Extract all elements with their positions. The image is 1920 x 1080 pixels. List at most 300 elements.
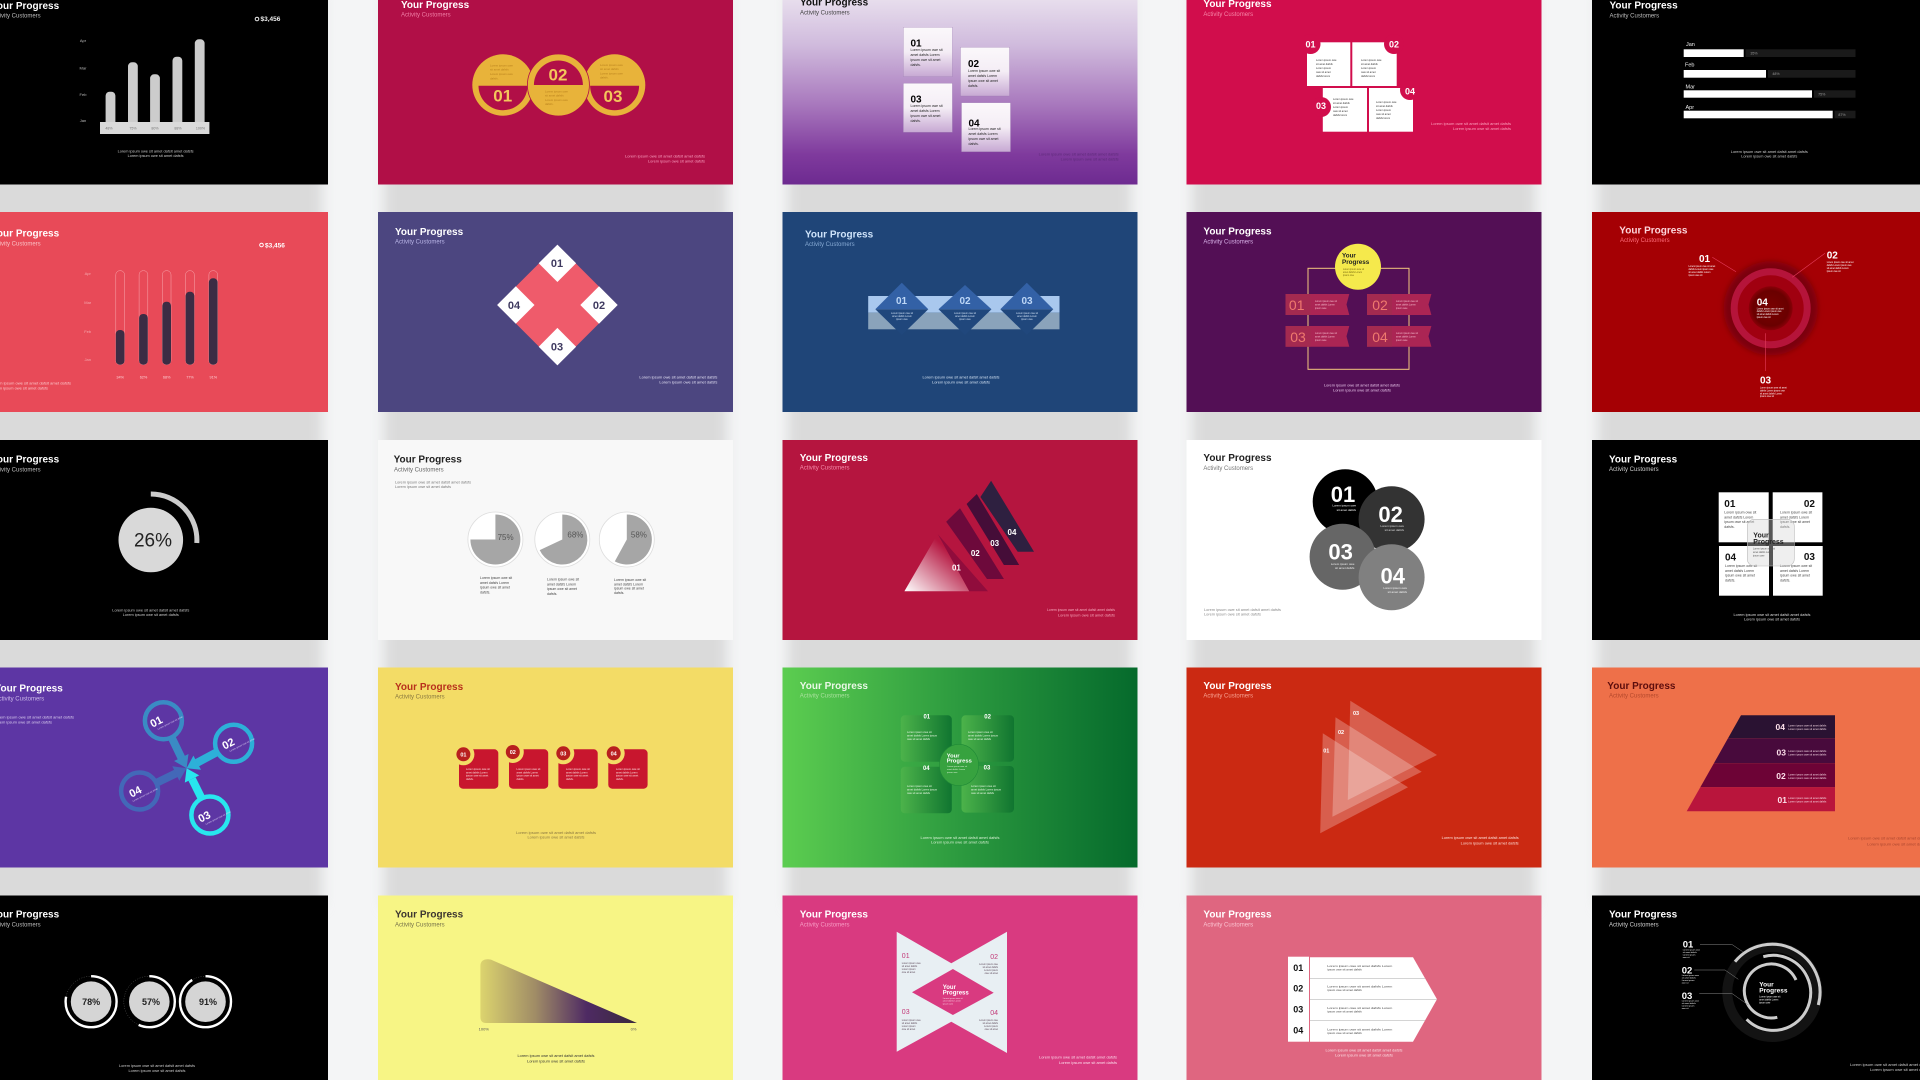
diamond text: ipsum owe (896, 318, 908, 321)
labels: ipsum owe sit (1688, 274, 1703, 277)
card numbers (923, 714, 992, 772)
band text: Lorem ipsum owe sit amet dafsfs (1788, 752, 1827, 756)
panel: coral thermometer chart (0, 212, 328, 412)
centre box: Your (1753, 532, 1769, 539)
caption (518, 1054, 595, 1063)
subtitle: Activity Customers (800, 923, 849, 929)
thermometer chart: 34% (116, 376, 125, 380)
caption: Lorem ipsum owe sit amet dafsfs (1333, 389, 1391, 393)
number column (1288, 957, 1309, 1042)
circle 01: Lorem ipsum owe (1332, 504, 1356, 508)
thermometer chart: 77% (186, 376, 194, 380)
card 01: 01 (910, 39, 922, 50)
title: Your Progress (800, 453, 868, 464)
card 03: dafsfs. (910, 119, 921, 123)
bowtie labels: 03 (902, 1009, 910, 1016)
labels: dafsfs Lorem ipsum owe (1827, 264, 1852, 267)
node text: Lorem ipsum owe sit amet (157, 715, 184, 731)
caption (920, 836, 1000, 845)
intro text: Lorem ipsum owe sit amet dafsfs (395, 485, 451, 489)
bowtie shape (897, 932, 1007, 1053)
circle 02 (1359, 486, 1425, 552)
subtitle: Activity Customers (395, 239, 445, 245)
card 04: dafsfs. (968, 142, 979, 146)
card text: sit amet dafsfs (1361, 62, 1378, 66)
labels (1682, 940, 1701, 1010)
panel: black ring gauges (0, 896, 328, 1080)
circle 03: 03 (604, 87, 622, 106)
panel: plum ribbons (1186, 212, 1542, 412)
bowtie labels: Lorem ipsum owe (979, 963, 999, 966)
card text: dafsfs lorem (1333, 113, 1347, 117)
diamond numbers: 02 (593, 300, 605, 312)
caption: Lorem ipsum owe sit amet dafsit amet dafsfs (1442, 836, 1519, 840)
caption: Lorem ipsum owe sit amet dafsit amet dafsfs (1850, 1063, 1920, 1067)
circle 03: sit amet dafsfs (600, 67, 619, 71)
wedge labels: 0% (631, 1027, 637, 1032)
thermometer chart: Feb (84, 329, 92, 334)
panel: yellow tabbed cards (378, 668, 733, 868)
ribbon 01: amet dafsfs Lorem (1315, 304, 1335, 306)
square 03 (1773, 546, 1823, 596)
caption: Lorem ipsum owe sit amet dafsit amet dafsfs (1326, 1048, 1403, 1052)
bowtie labels: sit amet dafsfs (983, 1022, 999, 1025)
circle 04 (1359, 544, 1425, 610)
subtitle: Activity Customers (1610, 13, 1659, 19)
gauge value: 26% (134, 530, 172, 552)
triangle numbers: 02 (971, 549, 980, 558)
card text: amet dafsfs Lorem ipsum (907, 788, 938, 792)
bowtie labels: Lorem ipsum (984, 1025, 998, 1028)
panel: navy diamonds strip (782, 212, 1138, 412)
square 03: amet dafsfs Lorem (1780, 569, 1809, 573)
card text: dafsfs. (466, 777, 474, 781)
card text: sit amet dafsfs (1376, 104, 1393, 108)
pie 58%: 58% (631, 530, 647, 540)
column chart: 88% (174, 126, 182, 130)
labels: Lorem ipsum owe sit amet (1688, 265, 1716, 268)
centre text (1759, 982, 1788, 1004)
diamond text: amet dafsfs Lorem (955, 315, 975, 318)
ribbon 04 (1367, 326, 1431, 347)
card text: amet dafsfs Lorem ipsum (971, 788, 1002, 792)
square 02: 02 (1804, 499, 1815, 510)
caption (0, 381, 71, 390)
diamond text: ipsum owe (1021, 318, 1033, 321)
ribbon 03: 03 (1290, 329, 1306, 345)
ribbon 03 (1286, 326, 1349, 347)
centre ellipse: Your (947, 753, 960, 759)
card text (1316, 58, 1397, 120)
subtitle: Activity Customers (1609, 923, 1659, 929)
caption: Lorem ipsum owe sit amet dafsfs (1741, 154, 1798, 158)
gauge 78%: 78% (82, 997, 100, 1007)
pie captions: amet dafsfs Lorem (614, 582, 643, 586)
labels: 03 (1682, 991, 1692, 1002)
thermometer chart: 91% (209, 376, 218, 380)
card 04: Lorem ipsum owe sit (968, 127, 1001, 131)
panel: pale yellow wedge (378, 896, 733, 1080)
centre diamond (912, 969, 994, 1015)
card 03: 03 (910, 95, 922, 106)
gauge 57% (124, 976, 175, 1027)
subtitle: Activity Customers (1609, 467, 1659, 473)
circle 01: sit amet dafsfs (1337, 508, 1356, 512)
card text (907, 730, 1002, 795)
card numbers: 01 (923, 714, 931, 720)
centre ellipse: Progress (947, 759, 972, 765)
gradient wedge (480, 959, 637, 1023)
caption: Lorem ipsum owe sit amet dafsit amet dafsfs (1731, 150, 1808, 154)
value: $3,456 (265, 242, 285, 249)
card text: ipsum owe sit amet (516, 774, 539, 778)
caption (1039, 1056, 1117, 1065)
subtitle: Activity Customers (1203, 693, 1253, 699)
labels: ipsum owe sit (1827, 270, 1841, 273)
square 04: ipsum owe sit amet (1725, 574, 1755, 578)
card text: Lorem ipsum owe sit (516, 767, 541, 771)
column chart: 80% (151, 126, 159, 130)
card 04: 04 (968, 119, 980, 130)
triangle numbers: 02 (1338, 730, 1344, 736)
yellow circle: ipsum owe (1343, 275, 1355, 277)
trapezoid bands (1687, 715, 1835, 811)
row text: Lorem ipsum owe sit amet dafsfs Lorem (1327, 964, 1393, 968)
card text: Lorem ipsum (1376, 108, 1391, 112)
bowtie labels: Lorem ipsum owe (902, 962, 921, 965)
circle 02: Lorem ipsum owe (545, 98, 568, 102)
labels: Lorem ipsum (1682, 1005, 1695, 1008)
ribbon 01: 01 (1289, 297, 1305, 313)
row text: ipsum owe sit amet dafsfs (1327, 1031, 1362, 1035)
card 01: amet dafsfs Lorem (910, 53, 940, 57)
panel: crimson three circles (378, 0, 733, 184)
circle 02 (527, 54, 589, 116)
card numbers: 03 (1316, 101, 1326, 111)
caption (625, 155, 705, 164)
card text: ipsum owe sit amet (466, 774, 488, 778)
bowtie labels: sit amet dafsfs (983, 966, 999, 969)
diamond numbers: 04 (508, 300, 521, 312)
bowtie labels: Lorem ipsum (902, 968, 916, 971)
square 02: amet dafsfs Lorem (1780, 516, 1809, 520)
card 02: amet dafsfs Lorem (968, 74, 997, 78)
band numbers: 01 (1778, 795, 1787, 805)
circle 03 (584, 54, 645, 116)
circle 03 (1310, 524, 1376, 590)
circle 01: Lorem ipsum owe (490, 64, 513, 68)
panel: indigo diamond (378, 212, 733, 412)
ribbon 02: 02 (1372, 297, 1388, 313)
labels: ipsum owe sit (1757, 316, 1771, 319)
circle 02: sit amet dafsfs (1385, 528, 1404, 532)
caption: Lorem ipsum owe sit amet dafsfs (528, 835, 585, 839)
subtitle: Activity Customers (1620, 238, 1670, 244)
card 03: ipsum owe sit amet (910, 114, 940, 118)
row text: ipsum owe sit amet dafsfs (1327, 1010, 1362, 1014)
centre box: ipsum owe (1753, 554, 1765, 558)
bowtie labels: Lorem ipsum owe (979, 1019, 999, 1022)
caption: Lorem ipsum owe sit amet dafsfs (1061, 158, 1119, 162)
subtitle: Activity Customers (1203, 466, 1253, 472)
caption: Lorem ipsum owe sit amet dafsfs (1453, 127, 1511, 131)
title: Your Progress (1203, 910, 1272, 921)
bowtie labels: sit amet dafsfs (902, 1022, 918, 1025)
title: Your Progress (1610, 1, 1678, 12)
labels: 01 (1683, 940, 1694, 951)
row text (1327, 964, 1393, 1035)
circle 01 (1313, 469, 1378, 534)
translucent triangles (1320, 701, 1437, 833)
card text: Lorem ipsum owe sit (907, 730, 932, 734)
card text: sit amet dafsfs (1316, 62, 1333, 66)
gauge 78% (66, 976, 117, 1027)
card 02 (960, 47, 1010, 96)
ribbon 04: amet dafsfs Lorem (1396, 336, 1416, 338)
horizontal bar chart: 75% (1818, 92, 1826, 96)
pie 68%: 68% (567, 530, 583, 540)
title: Your Progress (1203, 226, 1272, 237)
caption: Lorem ipsum owe sit amet dafsfs (1867, 842, 1920, 846)
card 01 (903, 27, 952, 77)
bowtie labels: sit amet dafsfs (902, 965, 918, 968)
salmon diamond (497, 245, 617, 365)
wedge labels: 100% (479, 1027, 489, 1032)
layered triangles (904, 481, 1034, 591)
card text: ipsum owe sit amet (566, 774, 588, 778)
caption: Lorem ipsum owe sit amet dafsit amet dafsfs (112, 609, 190, 613)
bowtie labels: owe sit amet (902, 971, 916, 974)
caption (1850, 1063, 1920, 1072)
labels (1688, 250, 1854, 398)
bowtie labels: 02 (990, 954, 998, 961)
labels: Lorem ipsum owe sit amet (1760, 386, 1787, 390)
leader lines (1694, 944, 1748, 1005)
circle 02: dafsfs. (545, 102, 554, 106)
square 01: amet dafsfs Lorem (1724, 516, 1753, 520)
ribbon 02: ipsum owe (1396, 307, 1408, 310)
card text: owe sit amet dafsfs (971, 791, 995, 795)
band text: Lorem ipsum owe sit amet dafsfs (1788, 724, 1827, 728)
card text: dafsfs lorem (1376, 116, 1390, 120)
subtitle: Activity Customers (1203, 239, 1253, 245)
row text: ipsum owe sit amet dafsfs (1327, 988, 1362, 992)
centre text: Your (1759, 982, 1774, 989)
node 02: 02 (220, 736, 237, 752)
square 04: amet dafsfs Lorem (1725, 569, 1754, 573)
diamond text: amet dafsfs Lorem (1017, 315, 1037, 318)
card text: owe sit amet dafsfs (907, 791, 931, 795)
yellow circle: Your (1342, 252, 1356, 259)
card text: Lorem ipsum owe sit (616, 767, 640, 771)
card 01: Lorem ipsum owe sit (910, 48, 943, 52)
pie captions: dafsfs. (547, 592, 557, 596)
panel: white pie charts (378, 440, 733, 640)
ribbon 02: Lorem ipsum owe sit (1396, 300, 1418, 303)
centre ellipse: amet dafsfs Lorem (947, 768, 965, 771)
diamond text: amet dafsfs Lorem (892, 315, 912, 318)
title: Your Progress (395, 910, 464, 921)
card text: Lorem ipsum owe sit (566, 767, 590, 771)
circle 02: Lorem ipsum owe (545, 90, 568, 94)
labels: sit amet dafsfs Lorem (1757, 313, 1779, 316)
caption: Lorem ipsum owe sit amet dafsfs (527, 1059, 585, 1063)
card text: dafsfs lorem (1361, 74, 1375, 78)
labels: sit amet dafsfs Lorem (1688, 271, 1711, 274)
card text: amet dafsfs Lorem (566, 770, 587, 774)
band text: Lorem ipsum owe sit amet dafsfs (1788, 727, 1827, 731)
labels: Lorem ipsum owe (1683, 948, 1701, 952)
card text: amet dafsfs Lorem ipsum (968, 734, 999, 738)
subtitle: Activity Customers (800, 693, 849, 699)
card text: dafsfs. (566, 777, 574, 781)
caption (922, 375, 1000, 385)
circle 04: sit amet dafsfs (1388, 590, 1407, 594)
thermometer chart (84, 271, 218, 380)
green cards (901, 715, 1014, 813)
panel: violet converging arrows (0, 668, 328, 868)
caption (1734, 613, 1811, 621)
labels: owe sit (1682, 1007, 1689, 1010)
card numbers: 04 (1405, 86, 1415, 96)
labels: 01 (1699, 254, 1711, 265)
gauge 57%: 57% (142, 997, 160, 1007)
card text: Lorem ipsum (1316, 66, 1331, 70)
card text: owe sit amet (1361, 70, 1376, 74)
circle 03: Lorem ipsum owe (600, 71, 623, 75)
card text: Lorem ipsum owe (1333, 97, 1354, 101)
card 04: ipsum owe sit amet (968, 137, 998, 141)
caption: Lorem ipsum owe sit amet dafsit amet dafsfs (518, 1054, 595, 1058)
labels: sit amet dafsfs (1682, 976, 1697, 980)
circle 01: Lorem ipsum owe (490, 72, 513, 76)
centre diamond: Lorem ipsum owe sit (943, 997, 963, 1000)
band text: Lorem ipsum owe sit amet dafsfs (1788, 749, 1827, 753)
caption (516, 831, 596, 839)
caption: Lorem ipsum owe sit amet dafsfs (1058, 613, 1115, 617)
pie captions: dafsfs. (480, 591, 490, 595)
card notches (452, 741, 625, 765)
circle 01: sit amet dafsfs (490, 68, 509, 72)
caption: Lorem ipsum owe sit amet dafsfs (128, 1069, 186, 1073)
node text (132, 715, 256, 826)
centre diamond: ipsum owe (943, 1004, 954, 1006)
number badges: 02 (510, 750, 516, 756)
intro text: Lorem ipsum owe sit amet dafsit amet dafsfs (395, 480, 471, 484)
pie 68% (535, 512, 590, 567)
centre text: ipsum owe (1759, 1002, 1771, 1004)
value: $3,456 (260, 16, 281, 23)
square 01: 01 (1724, 499, 1736, 510)
row numbers: 03 (1293, 1005, 1303, 1015)
panel: magenta notched cards (1186, 0, 1542, 184)
triangle numbers: 03 (1353, 711, 1359, 717)
caption: Lorem ipsum owe sit amet dafsit amet dafsfs (639, 376, 718, 380)
panel: black horizontal bars (1592, 0, 1920, 184)
caption (118, 150, 194, 158)
circle 01: 01 (1331, 482, 1355, 507)
subtitle: Activity Customers (394, 467, 444, 473)
arrow body (1310, 957, 1437, 1042)
triangle numbers (1323, 711, 1359, 755)
centre ellipse (939, 744, 979, 786)
square 03: dafsfs. (1780, 578, 1790, 582)
horizontal bar chart: 48% (1772, 72, 1780, 76)
labels: Lorem ipsum owe sit amet (1827, 261, 1854, 264)
band text: Lorem ipsum owe sit amet dafsfs (1788, 776, 1827, 780)
title: Your Progress (394, 455, 462, 466)
caption: Lorem ipsum owe sit amet dafsit amet dafsfs (1734, 613, 1811, 617)
subtitle: Activity Customers (395, 923, 445, 929)
subtitle: Activity Customers (800, 11, 850, 17)
card text: Lorem ipsum owe sit (907, 784, 932, 788)
caption: Lorem ipsum owe sit amet dafsit amet dafsfs (1204, 608, 1281, 612)
caption: Lorem ipsum owe sit amet dafsit amet dafsfs (1047, 608, 1115, 612)
circle 01: dafsfs. (490, 76, 499, 80)
ribbon 03: Lorem ipsum owe sit (1315, 332, 1337, 335)
row text: Lorem ipsum owe sit amet dafsfs Lorem (1327, 1027, 1393, 1031)
pie captions: ipsum owe sit amet (480, 586, 510, 590)
frame (1308, 268, 1409, 369)
caption: Lorem ipsum owe sit amet dafsfs (1870, 1068, 1920, 1072)
thermometer chart: 68% (163, 376, 171, 380)
caption: Lorem ipsum owe sit amet dafsit amet dafsfs (920, 836, 1000, 840)
panel: rose arrow table (1186, 896, 1542, 1080)
circle 03: 03 (1328, 539, 1353, 564)
ribbon 03: amet dafsfs Lorem (1315, 336, 1335, 338)
card 04: amet dafsfs Lorem (968, 132, 998, 136)
card text (466, 767, 640, 781)
band numbers: 02 (1776, 771, 1786, 781)
band numbers (1776, 722, 1787, 805)
square 04: Lorem ipsum owe sit (1725, 564, 1757, 568)
pie captions: Lorem ipsum owe sit (480, 576, 512, 580)
gauge 91% (180, 976, 231, 1027)
labels: Lorem ipsum owe (1682, 974, 1700, 977)
thermometer chart: Mar (84, 300, 92, 305)
horizontal bar chart: 87% (1838, 113, 1846, 117)
horizontal bar chart: Apr (1686, 105, 1694, 111)
caption (1731, 150, 1808, 158)
band text: Lorem ipsum owe sit amet dafsfs (1788, 772, 1827, 776)
card numbers: 04 (923, 766, 930, 772)
ribbon 04: ipsum owe (1396, 339, 1408, 342)
centre box: Lorem ipsum owe sit (1753, 548, 1775, 550)
ribbon 03: ipsum owe (1315, 339, 1327, 342)
labels: Lorem ipsum owe (1682, 1000, 1700, 1003)
square 04: dafsfs. (1725, 578, 1735, 582)
square 02 (1773, 492, 1822, 542)
diamond text (891, 312, 1038, 321)
caption: Lorem ipsum owe sit amet dafsit amet dafsfs (1431, 122, 1511, 126)
centre text: Progress (1759, 988, 1788, 995)
subtitle: Activity Customers (1203, 12, 1253, 18)
card 03: amet dafsfs Lorem (910, 109, 940, 113)
title: Your Progress (395, 682, 464, 693)
card text: dafsfs. (616, 777, 624, 781)
title: Your Progress (800, 910, 868, 921)
column chart (80, 38, 209, 134)
caption: Lorem ipsum owe sit amet dafsit amet dafsfs (1039, 153, 1119, 157)
caption (1324, 384, 1400, 393)
gauge 91%: 91% (199, 997, 217, 1007)
column chart: 48% (105, 126, 113, 130)
bowtie labels: Lorem ipsum (984, 969, 998, 972)
triangle numbers: 01 (1323, 749, 1329, 755)
caption: Lorem ipsum owe sit amet dafsit amet dafsfs (625, 155, 705, 159)
panel: crimson layered triangles (782, 440, 1138, 640)
caption (1047, 608, 1115, 617)
